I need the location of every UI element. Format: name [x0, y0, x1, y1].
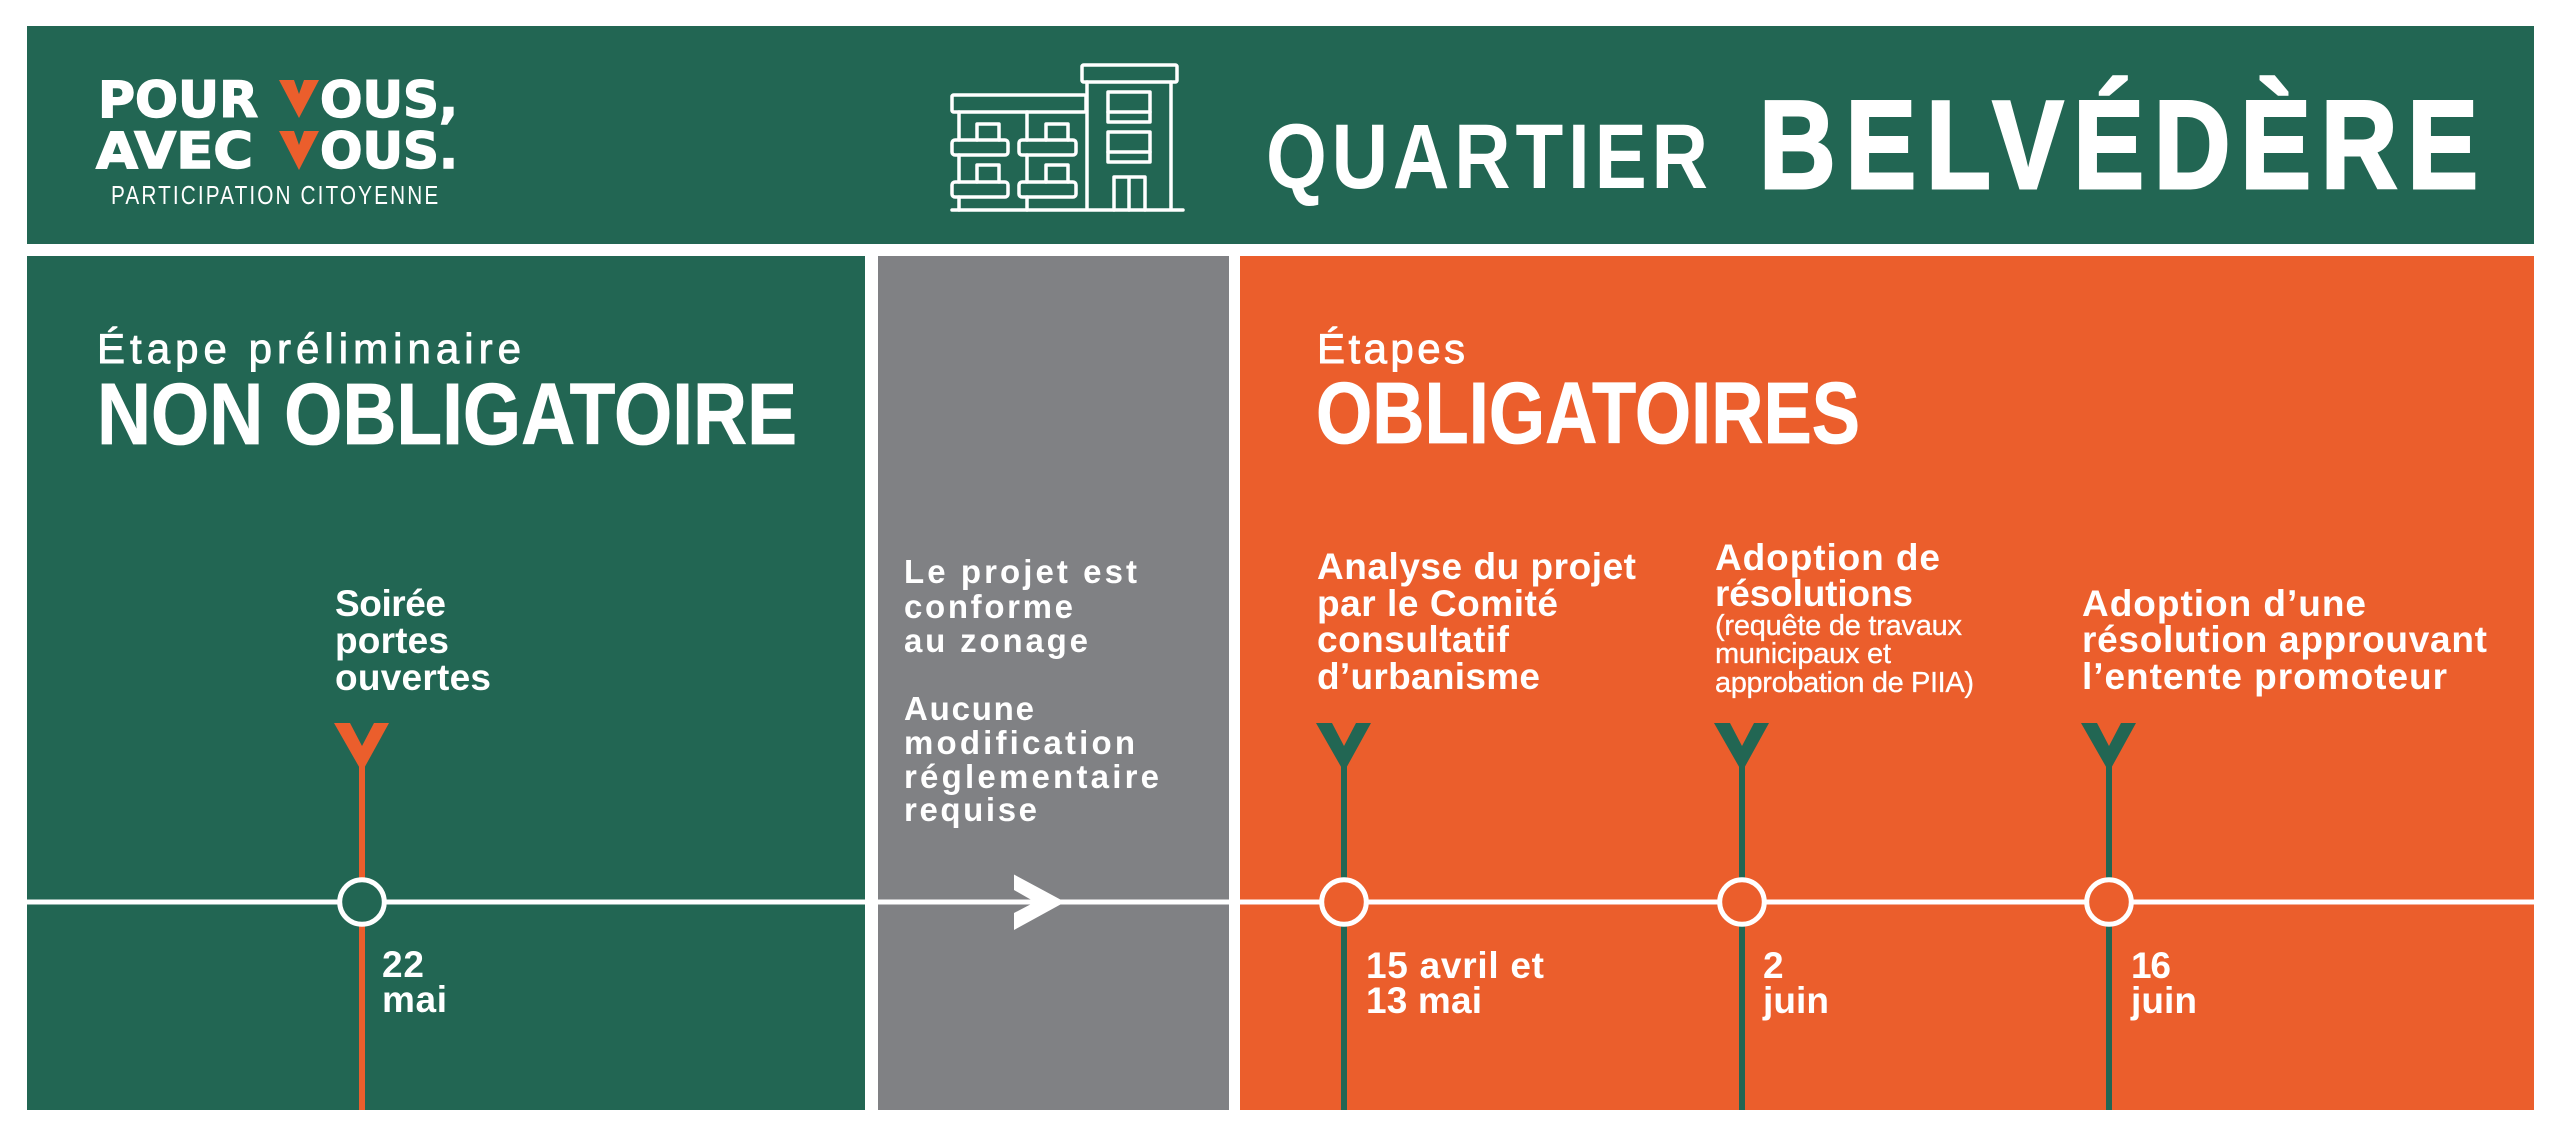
heading: non obligatoire: NON OBLIGATOIRE	[97, 366, 797, 463]
logo: Pour vous, avec vous: OUS,	[320, 71, 458, 129]
node	[1322, 880, 1366, 924]
heading: non obligatoire: Étape préliminaire	[97, 325, 521, 372]
panel: conforming project	[878, 256, 1229, 1110]
date: 22 mai: mai	[382, 979, 447, 1020]
step: adoption d'une résolution: résolution approuvant	[2082, 619, 2487, 660]
text: soirée portes ouvertes: portes	[335, 620, 449, 661]
step: adoption de résolutions: approbation de PIIA)	[1715, 667, 1974, 699]
title: QUARTIER	[1266, 106, 1708, 208]
text: soirée portes ouvertes: ouvertes	[335, 657, 491, 698]
marker: stem and V	[1316, 723, 1371, 1110]
text: project compliance note: Le projet est	[904, 553, 1137, 590]
step: analyse du projet: d’urbanisme	[1317, 656, 1540, 697]
step: adoption de résolutions: 2	[1763, 945, 1784, 986]
panel: header band	[27, 26, 2534, 244]
step: adoption de résolutions: résolutions	[1715, 573, 1913, 614]
step: analyse du projet: Analyse du projet	[1317, 546, 1636, 587]
text: project compliance note	[904, 553, 1159, 828]
step: analyse du projet: par le Comité	[1317, 583, 1558, 624]
icon: orange V, second line	[279, 131, 319, 170]
step: adoption de résolutions: juin	[1762, 980, 1829, 1021]
heading: non obligatoire	[97, 325, 797, 463]
node	[2087, 880, 2131, 924]
marker: stem and V	[334, 723, 389, 1110]
step: adoption d'une résolution: Adoption d’une	[2082, 583, 2366, 624]
text: soirée portes ouvertes: Soirée	[335, 583, 446, 624]
text: project compliance note: au zonage	[904, 622, 1088, 659]
node	[1720, 880, 1764, 924]
heading: obligatoires: OBLIGATOIRES	[1316, 365, 1860, 462]
step: analyse du projet	[1316, 546, 1636, 1110]
marker: stem and V	[2081, 723, 2136, 1110]
step: adoption de résolutions: Adoption de	[1715, 537, 1940, 578]
timeline segment	[1240, 900, 2534, 904]
text: soirée portes ouvertes	[335, 583, 491, 698]
logo: Pour vous, avec vous: OUS.	[320, 122, 458, 180]
step: adoption de résolutions	[1714, 537, 1974, 1110]
heading: obligatoires	[1316, 325, 1860, 462]
panel: optional stage	[27, 256, 865, 1110]
text: project compliance note: Aucune	[904, 690, 1034, 727]
title	[1266, 75, 2478, 215]
logo: Pour vous, avec vous: PARTICIPATION CITOYENNE	[111, 181, 438, 210]
text: project compliance note: réglementaire	[904, 758, 1159, 795]
step: adoption d'une résolution: juin	[2130, 980, 2197, 1021]
text: project compliance note: conforme	[904, 588, 1073, 625]
marker: stem and V	[1714, 723, 1769, 1110]
step: adoption de résolutions: (requête de travaux	[1715, 610, 1962, 642]
title: BELVÉDÈRE	[1759, 75, 2478, 215]
step: adoption d'une résolution: 16	[2131, 945, 2171, 986]
heading: obligatoires: Étapes	[1317, 325, 1465, 372]
date: 22 mai: 22	[382, 944, 424, 985]
step: adoption d'une résolution: l’entente promoteur	[2082, 656, 2447, 697]
step: analyse du projet: 13 mai	[1366, 980, 1482, 1021]
logo: Pour vous, avec vous: POUR	[98, 71, 258, 129]
node: 22 mai	[340, 880, 384, 924]
text: project compliance note: modification	[904, 724, 1135, 761]
step: adoption de résolutions: municipaux et	[1715, 638, 1891, 670]
timeline segment	[27, 900, 865, 904]
arrow	[1014, 874, 1065, 930]
panel: mandatory stages	[1240, 256, 2534, 1110]
date: 22 mai	[382, 944, 447, 1020]
step: analyse du projet: 15 avril et	[1366, 945, 1544, 986]
timeline segment	[878, 900, 1229, 904]
icon: orange V, first line	[279, 80, 319, 118]
icon: apartment building	[952, 65, 1183, 210]
text: project compliance note: requise	[904, 791, 1037, 828]
logo: Pour vous, avec vous	[96, 71, 458, 210]
logo: Pour vous, avec vous: AVEC	[96, 122, 253, 180]
step: adoption d'une résolution	[2081, 583, 2487, 1110]
step: analyse du projet: consultatif	[1317, 619, 1510, 660]
